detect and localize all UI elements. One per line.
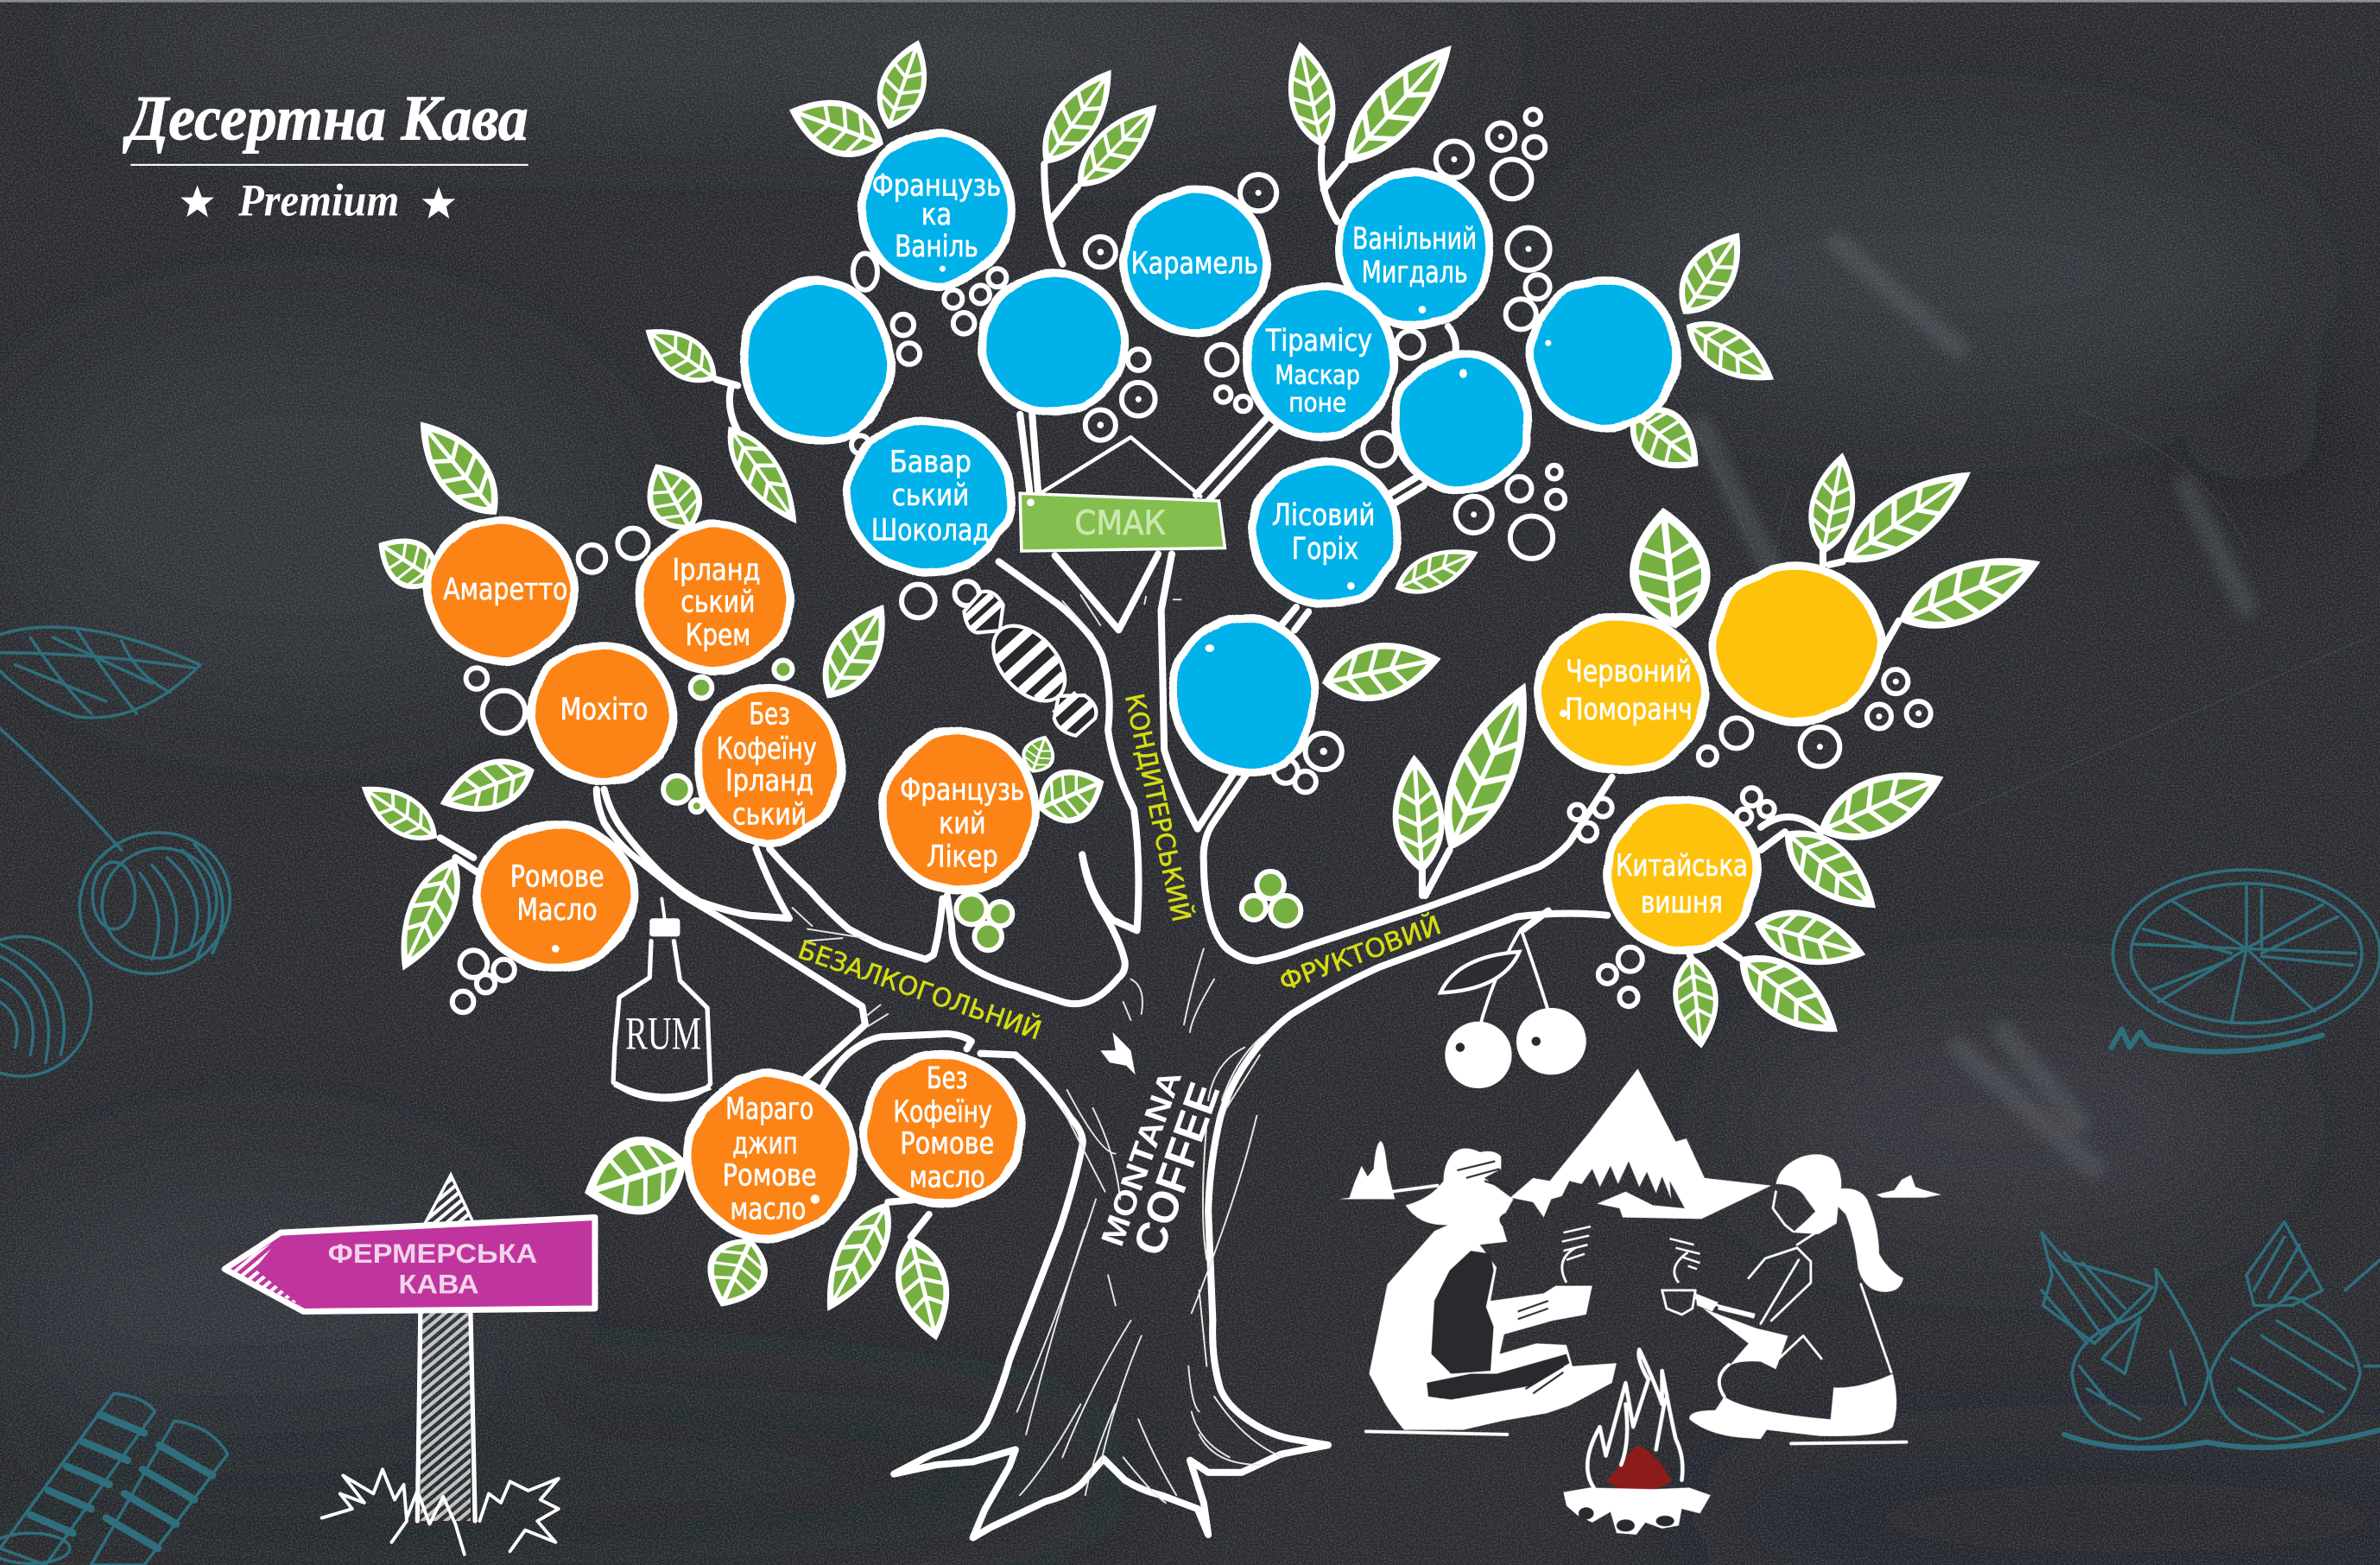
fruit: Червоний Поморанч: Поморанч xyxy=(1565,693,1693,727)
leaf xyxy=(1801,448,1864,558)
sign: СМАК xyxy=(1020,437,1225,551)
fruit: Китайська вишня xyxy=(1607,798,1757,950)
title: Premium xyxy=(237,176,399,226)
fruit: Тірамісу Маскарпоне xyxy=(1248,285,1394,437)
title xyxy=(123,83,529,226)
title: Десертна Кава xyxy=(123,83,529,154)
leaf xyxy=(1614,390,1716,488)
fruit: Французька Ваніль: Ваніль xyxy=(895,230,978,264)
fruit: Без Кофеїну Ромове масло: масло xyxy=(909,1160,985,1194)
logo: Montana Coffee: COFFEE xyxy=(1124,1076,1229,1262)
fruit: Французький Лікер xyxy=(883,730,1035,891)
fruit: Французька Ваніль: ка xyxy=(921,198,952,232)
fruit: Без Кофеїну Ромове масло: Без xyxy=(927,1061,968,1096)
leaf xyxy=(1888,535,2051,647)
fruit: Мохіто: Мохіто xyxy=(560,693,649,727)
campers scene: mountain and horizon xyxy=(1339,1068,1941,1219)
fruit: Французький Лікер: Лікер xyxy=(927,840,998,875)
bark lines and tree detail xyxy=(792,595,1282,1503)
fruit: Французький Лікер: Французь xyxy=(900,773,1024,808)
fruit: Баварський Шоколад: Бавар xyxy=(889,446,972,480)
berries: yellow group xyxy=(1569,669,1931,1006)
leaf xyxy=(1316,630,1446,711)
fruit: Без Кофеїну Ромове масло xyxy=(864,1055,1022,1204)
background sketch: hazelnuts right xyxy=(2041,1222,2380,1448)
fruit: Червоний Поморанч xyxy=(1538,617,1705,771)
campers scene: man with cup xyxy=(1366,1149,1617,1435)
bottle: RUM: RUM xyxy=(625,1006,701,1059)
fruit: Ванільний Мигдаль: Мигдаль xyxy=(1362,256,1468,290)
leaf xyxy=(1807,751,1955,858)
leaf xyxy=(1026,57,1130,177)
campers scene: woman with cup xyxy=(1662,1154,1907,1443)
leaf xyxy=(632,452,714,542)
fruit: Ірландський Крем: Ірланд xyxy=(673,553,761,587)
leaf xyxy=(1028,757,1115,834)
leaf xyxy=(1422,670,1553,862)
fruit: Без Кофеїну Ромове масло: Ромове xyxy=(900,1127,994,1162)
fruit: Французька Ваніль: Французь xyxy=(872,169,1001,204)
branch label: КОНДИТЕРСЬКИЙ: КОНДИТЕРСЬКИЙ xyxy=(1118,691,1197,924)
berries: blue group left xyxy=(851,237,1155,618)
fruit: Мараго джип Ромове масло: масло xyxy=(730,1192,806,1226)
fruit: Баварський Шоколад: Шоколад xyxy=(871,514,990,548)
fruit: Баварський Шоколад: ський xyxy=(892,478,969,513)
fruit: Карамель: Карамель xyxy=(1130,246,1258,281)
leaf xyxy=(1663,219,1759,328)
logo: Montana Coffee xyxy=(1094,1032,1229,1262)
fruit: Китайська вишня: Китайська xyxy=(1616,849,1748,884)
fruit: Мараго джип Ромове масло: Мараго xyxy=(725,1092,813,1126)
leaf xyxy=(1668,953,1724,1051)
leaf xyxy=(573,1124,698,1230)
direction sign: Фермерська кава: ФЕРМЕРСЬКА xyxy=(328,1238,537,1269)
fruit: Мараго джип Ромове масло: джип xyxy=(732,1127,798,1162)
bottle: RUM xyxy=(613,898,711,1099)
fruit: Французька Ваніль xyxy=(862,134,1011,285)
leaf xyxy=(1389,753,1448,875)
fruit: Мохіто xyxy=(533,645,673,782)
leaf xyxy=(1723,936,1854,1054)
fruit: Без Кофеїну Ромове масло: Кофеїну xyxy=(893,1095,992,1130)
fruit: Лісовий Горіх: Горіх xyxy=(1292,532,1358,567)
leaf xyxy=(1674,306,1786,398)
leaf xyxy=(712,415,813,535)
fruit: Без Кофеїну Ірландський: Без xyxy=(749,697,790,732)
leaf xyxy=(1828,451,1985,583)
leaf xyxy=(886,1231,961,1346)
fruit: Баварський Шоколад xyxy=(847,421,1011,573)
fruit: blank blue right xyxy=(1530,279,1675,428)
logo: Montana Coffee: MONTANA xyxy=(1094,1066,1188,1251)
fruit: Мараго джип Ромове масло xyxy=(687,1074,855,1239)
direction sign: Фермерська кава xyxy=(225,1175,595,1521)
fruit: blank blue centre right xyxy=(1395,354,1529,491)
leaf xyxy=(1748,898,1872,979)
fruit: Китайська вишня: вишня xyxy=(1641,885,1723,920)
grass xyxy=(322,1469,559,1555)
fruit: blank yellow xyxy=(1712,567,1879,721)
leaf xyxy=(780,85,893,169)
fruit: Без Кофеїну Ірландський xyxy=(699,687,841,842)
leaf xyxy=(634,313,729,396)
berries: blue group right xyxy=(1206,110,1565,792)
leaf xyxy=(1769,812,1892,928)
fruit: Лісовий Горіх xyxy=(1252,461,1398,604)
leaf xyxy=(808,1191,908,1322)
branch label: ФРУКТОВИЙ: ФРУКТОВИЙ xyxy=(1275,909,1446,998)
green berries xyxy=(663,661,1301,950)
leaf xyxy=(401,405,516,531)
fruit: Ванільний Мигдаль xyxy=(1339,173,1491,325)
fruit: Ромове Масло: Ромове xyxy=(510,859,604,894)
background sketch: leaf and cherries left xyxy=(0,627,250,1076)
fruit: Ромове Масло: Масло xyxy=(516,893,598,928)
fruit: Без Кофеїну Ірландський: Ірланд xyxy=(725,764,813,799)
leaf xyxy=(351,770,448,854)
leaf xyxy=(1326,29,1471,181)
sign: СМАК: СМАК xyxy=(1074,504,1166,543)
fruit: Карамель xyxy=(1124,190,1266,333)
leaf xyxy=(1278,37,1344,152)
fruit: Ірландський Крем xyxy=(639,525,791,671)
fruit: Без Кофеїну Ірландський: ський xyxy=(732,797,807,832)
berries: orange group xyxy=(453,529,649,1012)
berry seeds xyxy=(1097,134,1921,755)
fruit: Ірландський Крем: ський xyxy=(680,585,755,619)
fruit: Мараго джип Ромове масло: Ромове xyxy=(723,1159,817,1194)
branch label: БЕЗАЛКОГОЛЬНИЙ: БЕЗАЛКОГОЛЬНИЙ xyxy=(794,934,1045,1046)
fruit: Ромове Масло xyxy=(477,824,635,967)
leaf xyxy=(1062,90,1172,201)
fruit: Тірамісу Маскарпоне: Тірамісу xyxy=(1265,324,1372,358)
leaf xyxy=(1016,730,1061,778)
background sketch: wafer rolls bottom left xyxy=(0,1393,228,1565)
background sketch: orange slice right xyxy=(2111,870,2380,1052)
leaf xyxy=(432,746,542,827)
fruit: Ірландський Крем: Крем xyxy=(686,618,750,653)
tree trunk and branches xyxy=(440,147,1899,1537)
campfire xyxy=(1563,1349,1711,1535)
leaf xyxy=(693,1226,779,1319)
fruit: Французький Лікер: кий xyxy=(939,807,986,841)
candy xyxy=(952,582,1106,744)
leaf xyxy=(365,523,451,602)
fruit: Амаретто xyxy=(428,521,573,661)
leaf xyxy=(807,592,904,711)
direction sign: Фермерська кава: КАВА xyxy=(398,1268,479,1299)
fruit: Ванільний Мигдаль: Ванільний xyxy=(1352,222,1477,257)
fruit: Тірамісу Маскарпоне: Маскар xyxy=(1275,361,1360,391)
fruit: blank blue lower xyxy=(1174,618,1316,773)
fruit: Тірамісу Маскарпоне: поне xyxy=(1288,388,1346,418)
fruit: Лісовий Горіх: Лісовий xyxy=(1272,498,1375,533)
leaf xyxy=(866,33,940,136)
fruit: blank blue left xyxy=(744,281,889,441)
cherries xyxy=(1440,929,1586,1088)
fruit: Амаретто: Амаретто xyxy=(443,573,567,607)
fruit: Без Кофеїну Ірландський: Кофеїну xyxy=(717,732,817,767)
fruit: Червоний Поморанч: Червоний xyxy=(1566,655,1692,689)
fruit: blank blue middle xyxy=(982,273,1124,413)
leaf xyxy=(383,848,476,980)
leaf xyxy=(1623,504,1716,632)
leaf xyxy=(1388,535,1485,605)
